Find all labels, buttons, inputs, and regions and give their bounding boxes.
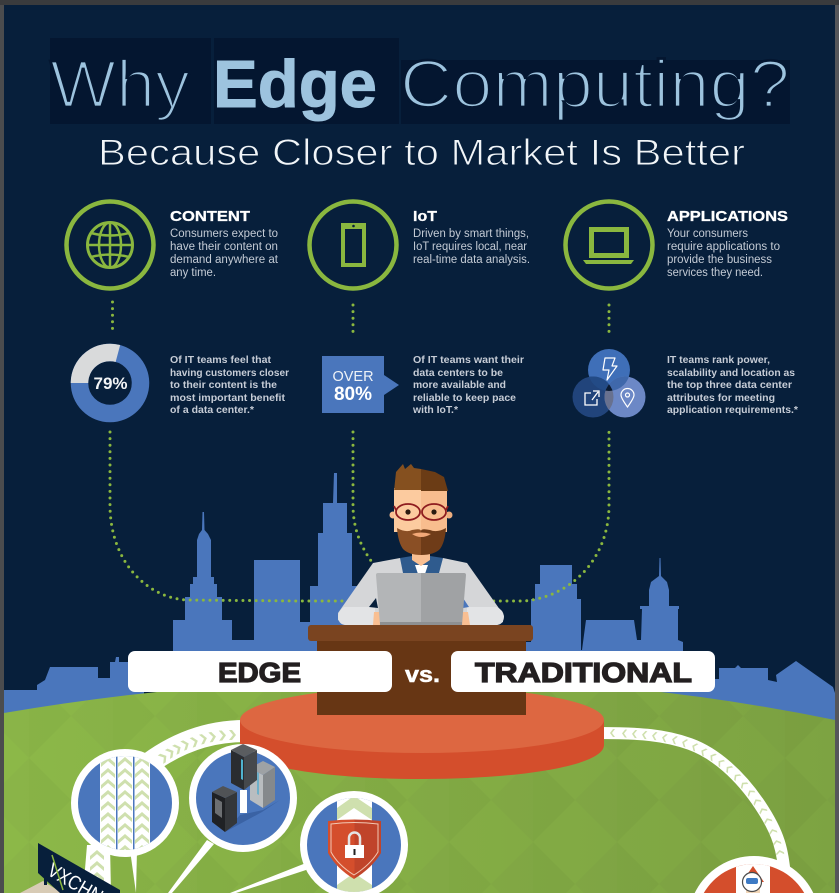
stat text: applications <box>667 355 798 416</box>
pointer: servers circle <box>168 840 214 893</box>
heading: iot: IoT <box>413 208 437 225</box>
torso and arms <box>338 548 504 625</box>
heading: applications: APPLICATIONS <box>667 208 788 225</box>
icon: location pin <box>621 389 634 407</box>
circle: security <box>300 791 408 893</box>
icon: glasses <box>394 504 448 520</box>
city skyline <box>4 473 835 730</box>
stat text: iot: more available and <box>413 380 506 391</box>
road: left arc to platform <box>143 730 245 768</box>
circle: rocket <box>695 856 813 893</box>
iot description: real-time data analysis. <box>413 254 530 266</box>
circle: lanes <box>71 749 179 857</box>
icon: external link <box>585 391 599 405</box>
panel: applications <box>566 202 788 288</box>
stat text: content: most important benefit <box>170 393 286 404</box>
iot description: Driven by smart things, <box>413 228 529 240</box>
desk <box>308 625 533 715</box>
icon: globe <box>66 202 154 288</box>
iot description: IoT requires local, near <box>413 241 527 253</box>
venn diagram: power, scalability, location <box>572 349 646 418</box>
label: traditional: TRADITIONAL <box>475 657 692 688</box>
sign: vxchng <box>38 843 120 893</box>
icon: rocket window <box>742 872 762 892</box>
stat text: iot: reliable to keep pace <box>413 393 516 404</box>
stat text: iot: with IoT.* <box>412 405 458 416</box>
pointer: lanes circle <box>130 850 137 893</box>
server: gray rack <box>250 761 275 808</box>
content description: have their content on <box>170 241 278 253</box>
roof: data center building <box>20 881 62 893</box>
stat text: iot: data centers to be <box>413 368 503 379</box>
circle: servers <box>189 744 297 852</box>
character at desk <box>338 464 504 625</box>
title: Why Edge Computing?: Edge <box>213 47 377 122</box>
server: short black rack <box>212 786 237 832</box>
callout: over 80% <box>322 356 399 413</box>
road: down from lanes circle <box>83 845 111 893</box>
head <box>390 464 452 555</box>
server: tall black rack <box>231 744 257 790</box>
content description: any time. <box>170 267 216 279</box>
platform <box>240 687 604 779</box>
label: traditional <box>451 651 715 692</box>
donut chart: 79%: 79% <box>93 374 128 393</box>
title: Why Edge Computing? <box>50 38 790 124</box>
stat text: applications: attributes for meeting <box>667 393 775 404</box>
pointer: security circle <box>230 863 306 893</box>
title: Why Edge Computing?: Why <box>50 47 191 122</box>
stat text: applications: IT teams rank power, <box>667 355 770 366</box>
icon: phone <box>310 202 396 288</box>
applications description: require applications to <box>667 241 780 253</box>
icon: shield with lock <box>328 820 381 879</box>
panel: iot <box>310 202 530 288</box>
iot description <box>413 228 530 266</box>
label: edge <box>128 651 392 692</box>
panel: content <box>66 202 279 288</box>
donut chart: 79% <box>79 352 140 414</box>
stat text: iot: Of IT teams want their <box>413 355 524 366</box>
label: edge: EDGE <box>218 657 301 688</box>
icon: laptop <box>566 202 652 288</box>
callout: over 80%: OVER <box>332 369 374 385</box>
title: Why Edge Computing?: Computing? <box>400 47 790 122</box>
dotted connector lines <box>110 432 609 601</box>
laptop <box>376 573 466 625</box>
road: right arc to platform <box>600 729 785 875</box>
stat text: content: to their content is the <box>170 380 277 391</box>
label: vs.: vs. <box>405 662 440 687</box>
stat text: iot <box>412 355 524 416</box>
heading: content: CONTENT <box>170 208 250 225</box>
stat text: content: of a data center.* <box>170 405 254 416</box>
stat text: content: Of IT teams feel that <box>170 355 272 366</box>
stat text: content: having customers closer <box>170 368 289 379</box>
green hill <box>4 678 835 893</box>
applications description: provide the business <box>667 254 772 266</box>
applications description: services they need. <box>667 267 763 279</box>
stat text: applications: the top three data center <box>667 380 792 391</box>
applications description: Your consumers <box>667 228 748 240</box>
content description: demand anywhere at <box>170 254 279 266</box>
icon: lightning <box>603 358 617 380</box>
stat text: content <box>170 355 289 416</box>
content description <box>170 228 279 279</box>
content description: Consumers expect to <box>170 228 278 240</box>
stat text: applications: scalability and location as <box>667 368 795 379</box>
applications description <box>667 228 780 279</box>
subtitle: Because Closer to Market Is Better <box>98 132 745 173</box>
callout: over 80%: 80% <box>334 384 372 405</box>
stat text: applications: application requirements.* <box>667 405 798 416</box>
